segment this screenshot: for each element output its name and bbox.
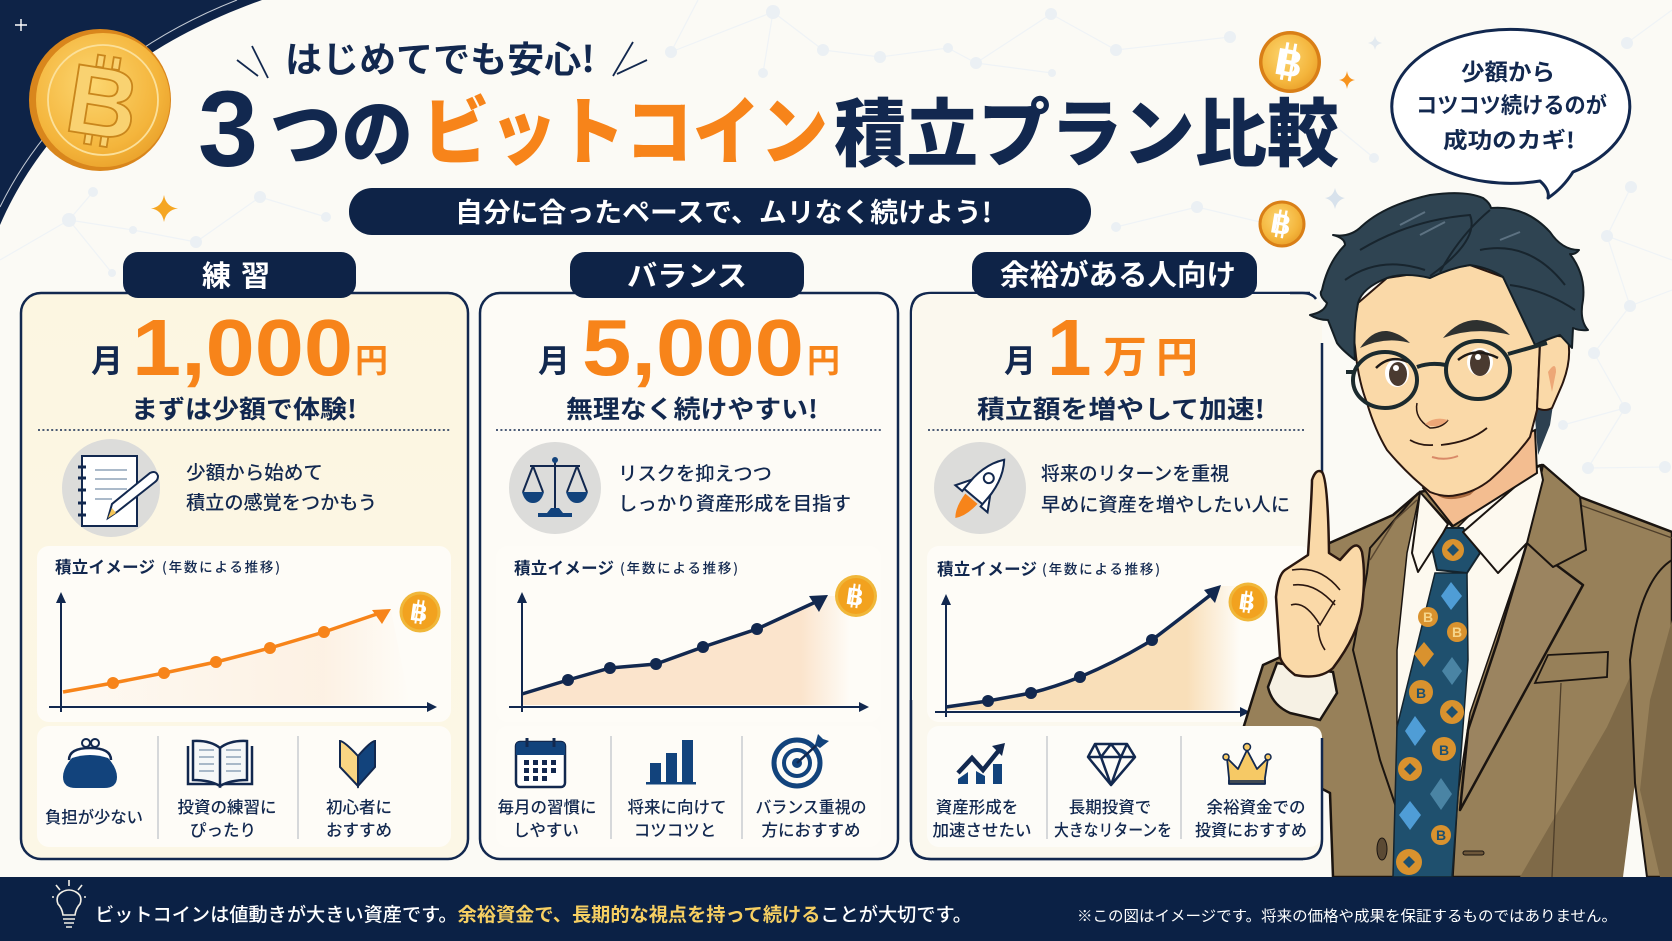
title: つの: [270, 75, 413, 182]
tagline: 積立額を増やして加速!: [977, 390, 1265, 426]
description: 少額から始めて: [186, 458, 323, 485]
icon: bar chart: [646, 740, 696, 784]
icon: calendar: [516, 738, 565, 787]
icon strip: おすすめ: [326, 817, 392, 841]
eyebrows: [1360, 320, 1510, 348]
labels: 毎月の習慣に: [498, 794, 596, 818]
chart panel: 積立イメージ: [37, 546, 451, 722]
character: businessman: [1238, 193, 1672, 877]
eyes: [1376, 348, 1498, 387]
title: 3: [198, 68, 258, 189]
description: しっかり資産形成を目指す: [618, 489, 851, 516]
price: 月1万円: 1: [1047, 303, 1092, 392]
icon strip: 方におすすめ: [762, 817, 860, 841]
price: 月1,000円: 1,000: [132, 303, 353, 392]
icon: balance scale: [509, 442, 601, 534]
description: 早めに資産を増やしたい人に: [1041, 490, 1290, 517]
icon: large bitcoin coin: [29, 29, 171, 171]
speech bubble: コツコツ続けるのが: [1416, 88, 1607, 120]
chart panel: 積立イメージ: 積立イメージ: [937, 556, 1037, 580]
icon strip: バランス重視の: [756, 794, 866, 818]
collar: [1412, 465, 1543, 573]
description: [1041, 459, 1290, 517]
subtitle pill: [349, 188, 1091, 235]
icon: open book: [188, 741, 252, 786]
icon: small coin top: B: [1272, 41, 1306, 87]
icon strip: 将来に向けて: [628, 794, 726, 818]
title: ビットコイン: [422, 73, 828, 180]
icon: small coin lower: B: [1268, 207, 1294, 241]
subtitle pill: 自分に合ったペースで、ムリなく続けよう!: [455, 191, 992, 230]
tie: B: [1439, 742, 1449, 758]
icon: diamond: [1088, 744, 1135, 785]
icon: purse: [63, 739, 117, 788]
icon strip: [496, 726, 881, 847]
icon: coin: [400, 592, 440, 632]
shirt: [1397, 465, 1541, 877]
description: 将来のリターンを重視: [1041, 459, 1229, 486]
neck: [1423, 430, 1537, 526]
icon: crown: [1223, 744, 1271, 784]
heading: subtitle: はじめてでも安心!: [285, 31, 595, 83]
chart panel: 積立イメージ: 積立イメージ: [55, 554, 155, 578]
panel: icon strip, 余裕がある人向け: [911, 700, 1322, 859]
panel: icon strip, 余裕がある人向け: 加速させたい: [932, 817, 1032, 841]
panel: icon strip, 余裕がある人向け: 長期投資で: [1069, 794, 1151, 818]
icon strip: 投資の練習に: [178, 794, 276, 818]
panel: 余裕がある人向け plan: [911, 252, 1322, 859]
price: 月5,000円: 円: [807, 334, 840, 382]
chart panel: 積立イメージ: (年数による推移): [162, 556, 280, 576]
footer message: ビットコインは値動きが大きい資産です。余裕資金で、長期的な視点を持って続けることが大切です。: [95, 900, 972, 927]
icon: growth chart: [958, 743, 1005, 784]
icon strip: [37, 726, 451, 847]
nose and mouth: [1410, 403, 1487, 459]
price: 月5,000円: 月: [538, 336, 570, 382]
panel: icon strip, 余裕がある人向け: 大きなリターンを: [1054, 817, 1172, 841]
description: リスクを抑えつつ: [618, 459, 772, 486]
tie: B: [1436, 827, 1446, 843]
icon: small coin lower: [1258, 200, 1306, 248]
tab: 練習: 練習: [202, 253, 270, 295]
icon strip: 初心者に: [326, 794, 392, 818]
description: [186, 458, 377, 515]
labels: 負担が少ない: [45, 804, 143, 828]
sparkles: [151, 36, 1382, 222]
icon: coin: B: [844, 583, 865, 612]
price: 月1万円: [1004, 303, 1198, 392]
tab: 余裕がある人向け: 余裕がある人向け: [1000, 252, 1236, 294]
tie: B: [1423, 609, 1433, 625]
tab: バランス: [570, 252, 804, 298]
hair: [1310, 193, 1588, 360]
title: 積立プラン比較: [834, 75, 1339, 182]
price: 月1万円: 円: [1156, 324, 1198, 385]
price: 月1,000円: 円: [355, 334, 388, 382]
description: [618, 459, 851, 516]
chart panel: 積立イメージ: [927, 546, 1312, 722]
tagline: 無理なく続けやすい!: [566, 390, 818, 426]
icon: beginner mark: [340, 741, 375, 786]
pocket and details: [1377, 652, 1608, 877]
description: 積立の感覚をつかもう: [186, 488, 377, 515]
speech bubble: 成功のカギ!: [1443, 123, 1575, 155]
tie: B: [1416, 685, 1426, 701]
panel: icon strip, 余裕がある人向け: 投資におすすめ: [1195, 817, 1307, 841]
icon strip: しやすい: [513, 817, 579, 841]
icon: coin: [1228, 582, 1268, 622]
title: [198, 68, 1339, 189]
jacket: [1238, 465, 1672, 877]
hand pointing: [1268, 471, 1364, 720]
tab: 練習: [123, 252, 356, 298]
icon: rocket: [934, 442, 1026, 534]
icon: small coin top: [1259, 31, 1321, 93]
icon: coin: B: [408, 599, 429, 628]
price: 月5,000円: [538, 303, 840, 392]
icon: coin: B: [1237, 589, 1257, 616]
price: 月1万円: 月: [1004, 336, 1036, 382]
icon: light bulb: [52, 880, 86, 927]
price: 月5,000円: 5,000: [582, 303, 804, 392]
icon: coin: [835, 575, 877, 617]
price: 月1,000円: 月: [91, 336, 123, 382]
icon: notebook and pencil: [62, 439, 160, 537]
panel: バランス plan: [480, 252, 898, 859]
price: 月1万円: 万: [1103, 321, 1147, 385]
tab: バランス: バランス: [627, 253, 747, 295]
panel: icon strip, 余裕がある人向け: 余裕資金での: [1206, 794, 1306, 818]
labels: 資産形成を: [936, 794, 1018, 818]
tagline: まずは少額で体験!: [131, 390, 357, 426]
chart panel: 積立イメージ: 積立イメージ: [514, 555, 614, 579]
navy corner shape: [0, 0, 262, 225]
glasses: [1346, 341, 1547, 408]
speech bubble: [1392, 29, 1630, 198]
chart panel: 積立イメージ: [496, 546, 881, 722]
lapel right: [1460, 543, 1583, 810]
footer banner: [0, 877, 1672, 941]
icon: target: [774, 734, 829, 786]
tie: [1393, 528, 1480, 877]
icon strip: コツコツと: [634, 817, 716, 841]
icon strip: ぴったり: [190, 817, 256, 841]
decorative emphasis lines: [237, 42, 647, 78]
icon: large bitcoin coin: B: [59, 42, 146, 162]
face: [1354, 265, 1540, 496]
chart panel: 積立イメージ: (年数による推移): [1042, 558, 1160, 578]
disclaimer: ※この図はイメージです。将来の価格や成果を保証するものではありません。: [1077, 905, 1617, 926]
chart panel: 積立イメージ: (年数による推移): [620, 557, 738, 577]
price: 月1,000円: [91, 303, 388, 392]
panel: 練習 plan: [21, 252, 468, 859]
back hair: [1534, 405, 1553, 455]
tie: B: [1452, 624, 1462, 640]
speech bubble: 少額から: [1461, 53, 1555, 87]
ear: [1537, 336, 1569, 410]
